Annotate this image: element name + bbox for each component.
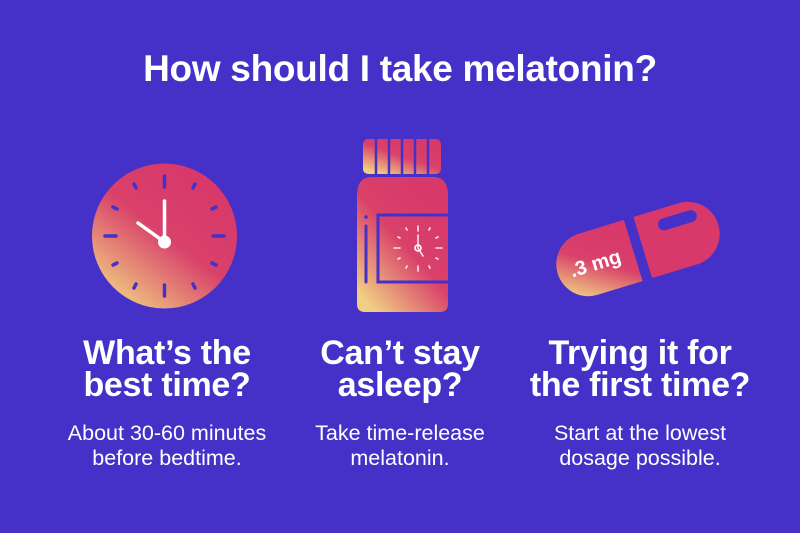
heading — [320, 334, 480, 404]
column: best time — [68, 334, 266, 470]
icon: bottle — [357, 139, 450, 312]
pill label: .3 mg — [567, 246, 624, 282]
heading — [83, 334, 251, 404]
heading: asleep? — [338, 366, 462, 404]
body text: Take time-release — [315, 421, 485, 445]
body text — [315, 421, 485, 470]
column: stay asleep — [315, 334, 485, 470]
body text: Start at the lowest — [554, 421, 726, 445]
icon: clock — [92, 164, 237, 308]
heading: best time? — [83, 366, 251, 404]
body text: dosage possible. — [559, 446, 721, 470]
heading: Can’t stay — [320, 334, 480, 372]
heading: Trying it for — [548, 334, 732, 372]
heading: What’s the — [83, 334, 251, 372]
body text: About 30-60 minutes — [68, 421, 266, 445]
column: first time — [530, 334, 750, 470]
body text — [68, 421, 266, 470]
icon: pill — [548, 194, 728, 304]
body text — [554, 421, 726, 470]
body text: melatonin. — [350, 446, 450, 470]
body text: before bedtime. — [92, 446, 242, 470]
title: How should I take melatonin? — [143, 48, 657, 89]
heading: the first time? — [530, 366, 750, 404]
heading — [530, 334, 750, 404]
